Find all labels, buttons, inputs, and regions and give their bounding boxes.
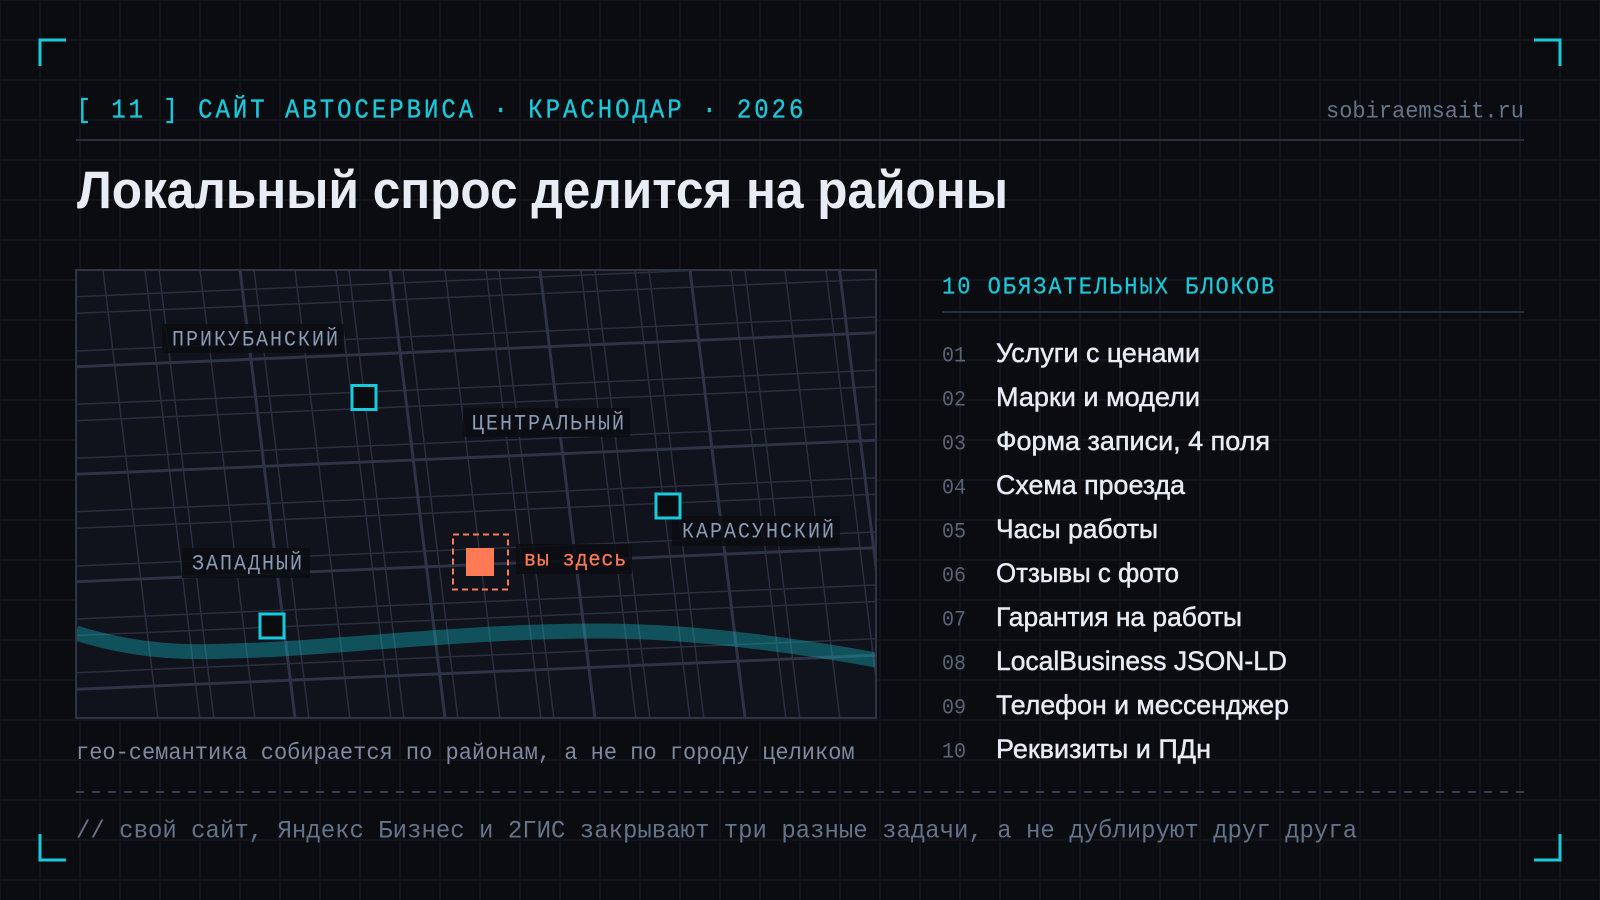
item 02: 02 — [942, 389, 966, 413]
map caption: гео-семантика собирается по районам, а не по городу целиком — [76, 740, 855, 766]
label: Центральный: ЦЕНТРАЛЬНЫЙ — [472, 412, 626, 437]
item 07: Гарантия на работы — [996, 602, 1242, 632]
marker: Западный — [260, 614, 284, 638]
item 06: 06 — [942, 565, 966, 589]
item 01: Услуги с ценами — [996, 338, 1200, 368]
label: Прикубанский: ПРИКУБАНСКИЙ — [172, 328, 340, 353]
item 05: Часы работы — [996, 514, 1158, 544]
marker: Карасунский — [656, 494, 680, 518]
item 10: 10 — [942, 741, 966, 765]
item 05: 05 — [942, 521, 966, 545]
item 07: 07 — [942, 609, 966, 633]
street grid — [76, 263, 894, 718]
marker: Прикубанский — [352, 386, 376, 410]
item 04: Схема проезда — [996, 470, 1185, 500]
list of required blocks — [942, 338, 1289, 765]
label: вы здесь: вы здесь — [524, 549, 627, 573]
item 06: Отзывы с фото — [996, 558, 1179, 588]
item 02: Марки и модели — [996, 382, 1200, 412]
marker: you are here — [453, 534, 508, 590]
item 09: Телефон и мессенджер — [996, 690, 1289, 720]
item 03: Форма записи, 4 поля — [996, 426, 1270, 456]
panel: district map — [76, 263, 894, 718]
label: Западный: ЗАПАДНЫЙ — [192, 552, 304, 577]
header label: [ 11 ] САЙТ АВТОСЕРВИСА · КРАСНОДАР · 2026 — [76, 94, 806, 126]
river — [76, 631, 876, 660]
list heading: 10 ОБЯЗАТЕЛЬНЫХ БЛОКОВ — [942, 274, 1276, 301]
footer note: // свой сайт, Яндекс Бизнес и 2ГИС закрывают три разные задачи, а не дублируют друг друга — [76, 818, 1357, 846]
item 03: 03 — [942, 433, 966, 457]
item 08: 08 — [942, 653, 966, 677]
item 04: 04 — [942, 477, 966, 501]
item 09: 09 — [942, 697, 966, 721]
label: Карасунский: КАРАСУНСКИЙ — [682, 520, 836, 545]
site name: sobiraemsait.ru — [1326, 98, 1524, 125]
item 01: 01 — [942, 345, 966, 369]
title: Локальный спрос делится на районы — [77, 161, 1008, 220]
item 10: Реквизиты и ПДн — [996, 734, 1211, 764]
item 08: LocalBusiness JSON-LD — [996, 646, 1287, 676]
